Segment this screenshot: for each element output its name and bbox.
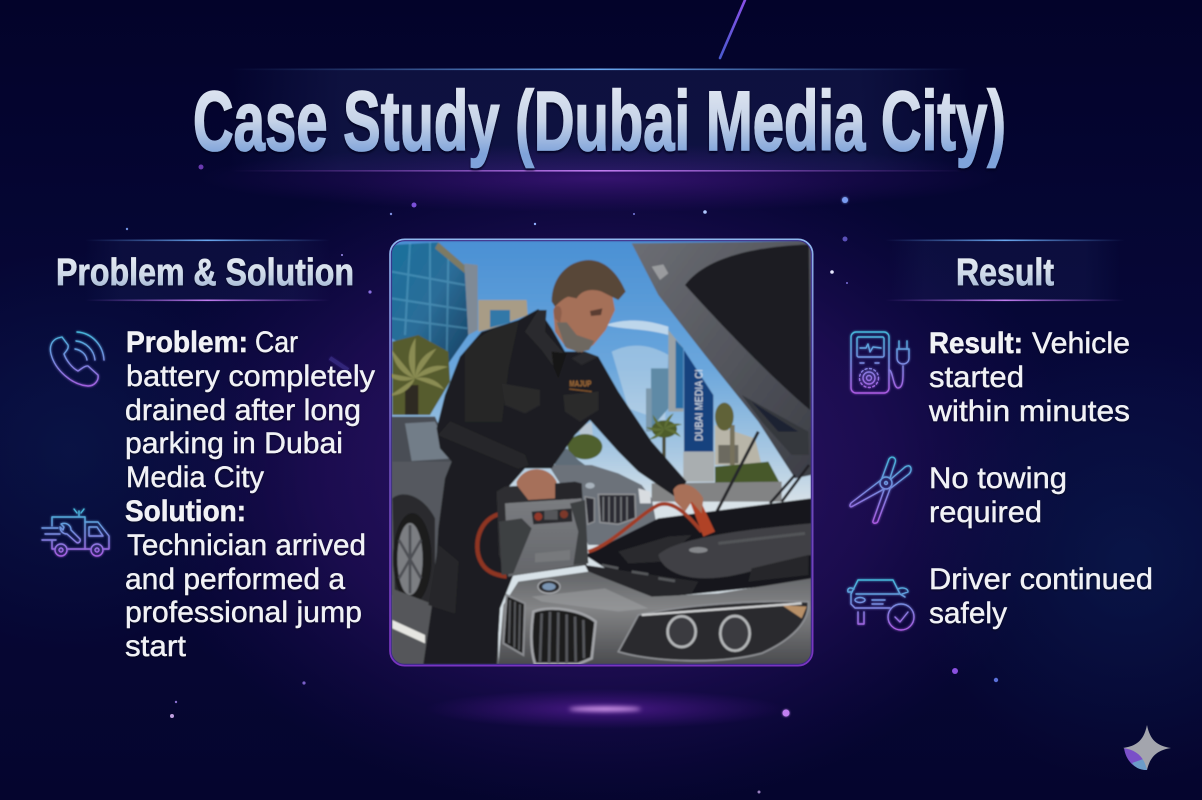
text: solution: Solution: xyxy=(125,495,246,528)
palm trees xyxy=(383,335,735,465)
text: no towing: required xyxy=(929,496,1042,529)
text: problem: drained after long xyxy=(125,394,361,427)
text: vehicle started xyxy=(928,327,1130,428)
photo: technician jump starting a car xyxy=(383,239,813,666)
heading: problem and solution xyxy=(56,240,354,301)
background buildings xyxy=(392,242,468,368)
text: solution: start xyxy=(125,630,187,663)
technician head xyxy=(553,282,615,352)
icon: battery tester xyxy=(851,332,909,393)
icon: phone call xyxy=(50,332,104,386)
front car xyxy=(498,572,811,664)
icon: jumper clamp xyxy=(850,457,911,523)
open hood xyxy=(632,241,811,478)
particles xyxy=(126,164,998,794)
text: driver continued: Driver continued xyxy=(929,563,1153,596)
text: solution xyxy=(125,495,366,663)
text: vehicle started: Vehicle xyxy=(1032,327,1130,360)
heading: result: Result xyxy=(956,252,1054,294)
text: vehicle started: Result: xyxy=(929,327,1023,360)
text: driver continued: safely xyxy=(929,597,1007,630)
text: problem: Media City xyxy=(126,461,264,494)
title banner xyxy=(193,68,1006,172)
panel: result xyxy=(848,240,1153,630)
text: problem: Car xyxy=(255,326,298,359)
heading: result xyxy=(885,240,1125,301)
text: problem: Problem: xyxy=(126,326,248,359)
text: problem xyxy=(125,326,375,494)
text: solution: Technician arrived xyxy=(127,529,366,562)
sign xyxy=(684,350,713,452)
photo: technician jump starting a car: DUBAI MEDIA CI xyxy=(693,369,705,441)
hands xyxy=(673,484,703,513)
heading: problem and solution: Problem & Solution xyxy=(56,252,354,294)
text: solution: and performed a xyxy=(125,563,345,596)
text: problem: battery completely xyxy=(126,360,375,393)
engine bay xyxy=(585,498,811,598)
technician body xyxy=(423,309,687,664)
second car behind xyxy=(548,465,657,545)
text: solution: professional jump xyxy=(125,596,362,629)
text: driver continued xyxy=(929,563,1153,630)
text: vehicle started: started xyxy=(929,361,1024,394)
icon: service van xyxy=(42,509,109,556)
cables xyxy=(477,513,507,577)
text: vehicle started: within minutes xyxy=(928,395,1130,428)
streak: top diagonal xyxy=(720,0,745,58)
left parked car xyxy=(392,416,452,508)
ground xyxy=(392,588,498,664)
panel: problem and solution xyxy=(42,240,375,663)
text: no towing: No towing xyxy=(929,462,1067,495)
icon: sparkle watermark xyxy=(1123,725,1171,770)
text: no towing xyxy=(929,462,1067,529)
icon: car with check xyxy=(848,580,914,630)
streak: bottom vertical xyxy=(736,734,738,800)
photo: technician jump starting a car: MAJUP xyxy=(569,380,592,389)
text: problem: parking in Dubai xyxy=(125,427,343,460)
jump starter pack xyxy=(497,483,587,577)
